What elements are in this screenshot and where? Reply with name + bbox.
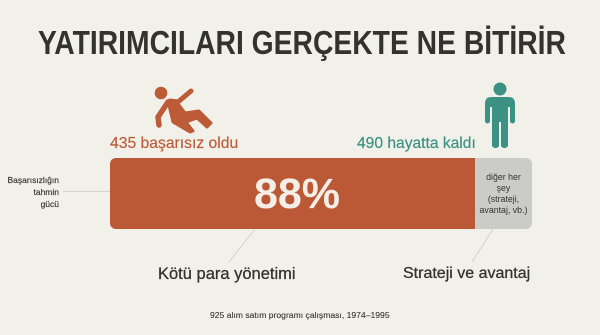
source note: 925 alım satım programı çalışması, 1974–1995 [210,310,390,320]
bar segment: everything else [480,172,527,215]
bar segment: everything else: diğer her [486,172,521,182]
bar segment: everything else: şey [497,183,510,193]
label: bad money management: Kötü para yönetimi [158,265,296,283]
stacked bar [110,158,532,229]
left note: predictive power [8,175,59,209]
label: strategy and edge: Strateji ve avantaj [403,265,530,282]
percentage: 88% [254,170,340,218]
title: YATIRIMCILARI GERÇEKTE NE BİTİRİR [38,24,566,61]
failed count label: 435 başarısız oldu [110,135,238,152]
icon: standing person [485,82,515,148]
bar segment: bad money management [110,158,475,229]
left note: predictive power: tahmin [33,187,59,197]
left note: predictive power: gücü [41,199,59,209]
connector line: note to bar [63,191,110,192]
bar segment: everything else: (strateji, [488,194,519,204]
survived count label: 490 hayatta kaldı [357,135,476,152]
left note: predictive power: Başarısızlığın [8,175,59,185]
bar segment: everything else: avantaj, vb.) [480,205,527,215]
